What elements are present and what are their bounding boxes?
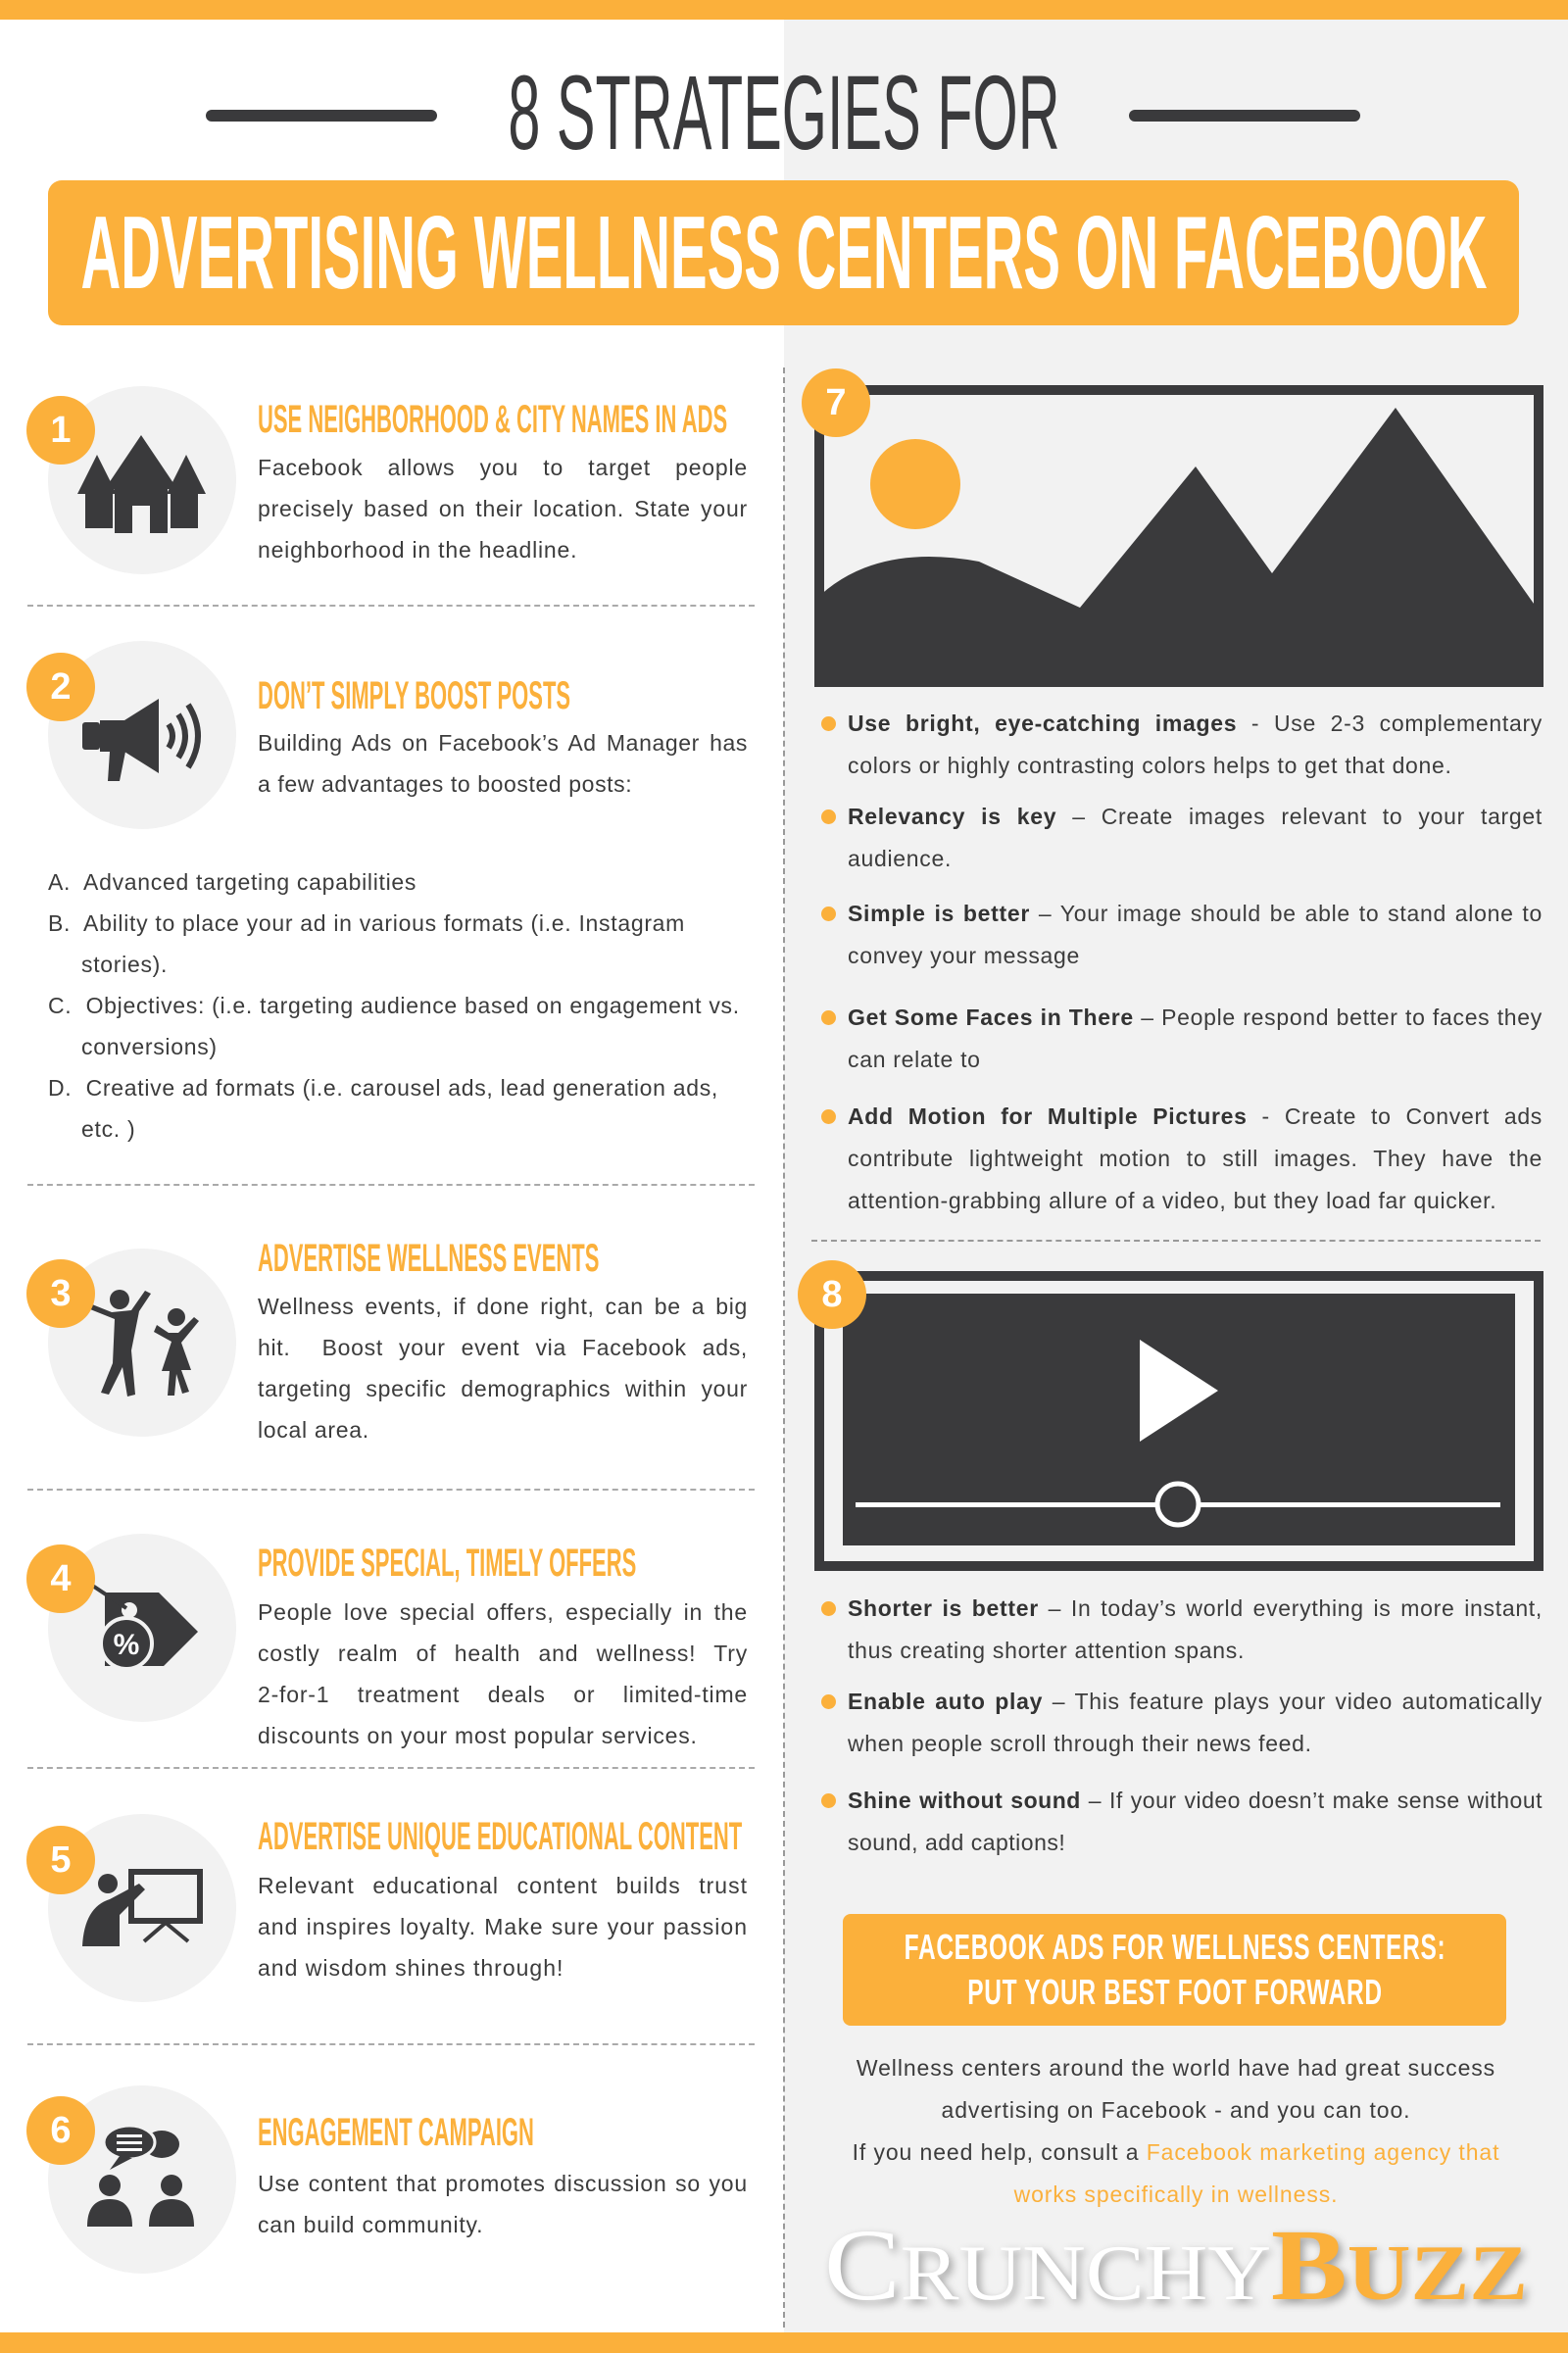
text: Get Some Faces in There – People respond better to faces they can relate to bbox=[848, 1005, 1543, 1072]
text: Shine without sound – If your video doesn’t make sense without sound, add captions! bbox=[848, 1788, 1543, 1855]
heading 2: DON’T SIMPLY BOOST POSTS bbox=[258, 674, 570, 717]
section 2 bbox=[26, 641, 748, 1142]
CTA box: FACEBOOK ADS FOR WELLNESS CENTERS: bbox=[904, 1927, 1446, 1967]
badge 2: 2 bbox=[50, 666, 72, 708]
text: Simple is better – Your image should be able to stand alone to convey your message bbox=[848, 901, 1543, 968]
closing paragraph: advertising on Facebook - and you can too. bbox=[942, 2097, 1410, 2123]
vertical divider bbox=[783, 368, 785, 2328]
bottom bar bbox=[0, 2332, 1568, 2353]
text: Use bright, eye-catching images - Use 2-3 complementary colors or highly contrasting colors helps to get that done. bbox=[848, 711, 1543, 778]
text 2: Building Ads on Facebook’s Ad Manager has a few advantages to boosted posts: bbox=[258, 730, 748, 797]
text: Enable auto play – This feature plays your video automatically when people scroll through their news feed. bbox=[848, 1689, 1543, 1756]
text 5: Relevant educational content builds trust and inspires loyalty. Make sure your passion and wisdom shines through! bbox=[258, 1873, 748, 1981]
badge 2 bbox=[26, 653, 95, 721]
title bbox=[206, 53, 1360, 172]
text 1: Facebook allows you to target people precisely based on their location. State your neighborhood in the headline. bbox=[258, 455, 748, 563]
badge 1: 1 bbox=[50, 410, 72, 451]
title: 8 STRATEGIES FOR bbox=[508, 53, 1060, 172]
closing paragraph bbox=[853, 2055, 1499, 2207]
text: Add Motion for Multiple Pictures - Create to Convert ads contribute lightweight motion to still images. They have the attention-grabbing allure of a video, but they load far quicker. bbox=[848, 1103, 1543, 1213]
heading 3: ADVERTISE WELLNESS EVENTS bbox=[258, 1237, 599, 1280]
list 2: A. Advanced targeting capabilities bbox=[48, 869, 416, 895]
section 5 bbox=[26, 1814, 748, 2002]
icon: houses bbox=[77, 435, 206, 533]
list 2: D. Creative ad formats (i.e. carousel ads, lead generation ads, etc. ) bbox=[48, 1075, 718, 1142]
icon: price tag bbox=[94, 1585, 198, 1667]
logo: CRUNCHYBUZZ bbox=[824, 2209, 1528, 2322]
icon: price tag: % bbox=[114, 1629, 139, 1661]
badge 3 bbox=[26, 1259, 95, 1328]
badge 7: 7 bbox=[825, 382, 847, 423]
closing paragraph: If you need help, consult a Facebook marketing agency that bbox=[853, 2139, 1499, 2165]
heading 4: PROVIDE SPECIAL, TIMELY OFFERS bbox=[258, 1542, 636, 1585]
icon: megaphone bbox=[82, 699, 202, 781]
icon: discussion people bbox=[87, 2127, 194, 2227]
list 2: C. Objectives: (i.e. targeting audience based on engagement vs. conversions) bbox=[48, 993, 740, 1059]
section 4 bbox=[26, 1534, 748, 1748]
CTA box bbox=[843, 1914, 1506, 2026]
badge 4 bbox=[26, 1544, 95, 1613]
badge 6 bbox=[26, 2096, 95, 2165]
panel 8: video illustration bbox=[798, 1260, 1544, 1571]
badge 5: 5 bbox=[50, 1839, 72, 1881]
badge 1 bbox=[26, 396, 95, 465]
heading 6: ENGAGEMENT CAMPAIGN bbox=[258, 2111, 534, 2154]
text 3: Wellness events, if done right, can be a big hit. Boost your event via Facebook ads, targeting specific demographics within your local area. bbox=[258, 1294, 748, 1443]
bullets 7 bbox=[821, 711, 1543, 1213]
closing paragraph: Wellness centers around the world have had great success bbox=[857, 2055, 1495, 2081]
list 2 bbox=[48, 869, 740, 1142]
bullets 8 bbox=[821, 1595, 1543, 1855]
badge 8 bbox=[798, 1260, 866, 1329]
badge 3: 3 bbox=[50, 1273, 72, 1314]
badge 6: 6 bbox=[50, 2110, 72, 2151]
section 6 bbox=[26, 2085, 748, 2274]
text 4: People love special offers, especially in the costly realm of health and wellness! Try 2-for-1 treatment deals or limited-time discounts on your most popular services. bbox=[258, 1599, 748, 1748]
top bar bbox=[0, 0, 1568, 20]
text: Relevancy is key – Create images relevant to your target audience. bbox=[848, 804, 1543, 871]
badge 4: 4 bbox=[50, 1558, 72, 1599]
right background panel bbox=[784, 0, 1568, 2353]
section 1 bbox=[26, 386, 748, 574]
heading 5: ADVERTISE UNIQUE EDUCATIONAL CONTENT bbox=[258, 1815, 742, 1858]
text: Shorter is better – In today’s world everything is more instant, thus creating shorter attention spans. bbox=[848, 1595, 1543, 1663]
banner: ADVERTISING WELLNESS CENTERS ON FACEBOOK bbox=[80, 195, 1487, 311]
icon: teacher bbox=[82, 1869, 203, 1946]
text 6: Use content that promotes discussion so you can build community. bbox=[258, 2171, 748, 2237]
heading 1: USE NEIGHBORHOOD & CITY NAMES IN ADS bbox=[258, 398, 727, 441]
icon: dancing people bbox=[90, 1290, 199, 1397]
list 2: B. Ability to place your ad in various formats (i.e. Instagram stories). bbox=[48, 910, 685, 977]
badge 5 bbox=[26, 1826, 95, 1894]
panel 7: image illustration bbox=[802, 368, 1544, 687]
badge 7 bbox=[802, 368, 870, 437]
badge 8: 8 bbox=[821, 1274, 843, 1315]
CTA box: PUT YOUR BEST FOOT FORWARD bbox=[967, 1972, 1382, 2012]
closing paragraph: works specifically in wellness. bbox=[1014, 2181, 1338, 2207]
section 3 bbox=[26, 1237, 748, 1443]
